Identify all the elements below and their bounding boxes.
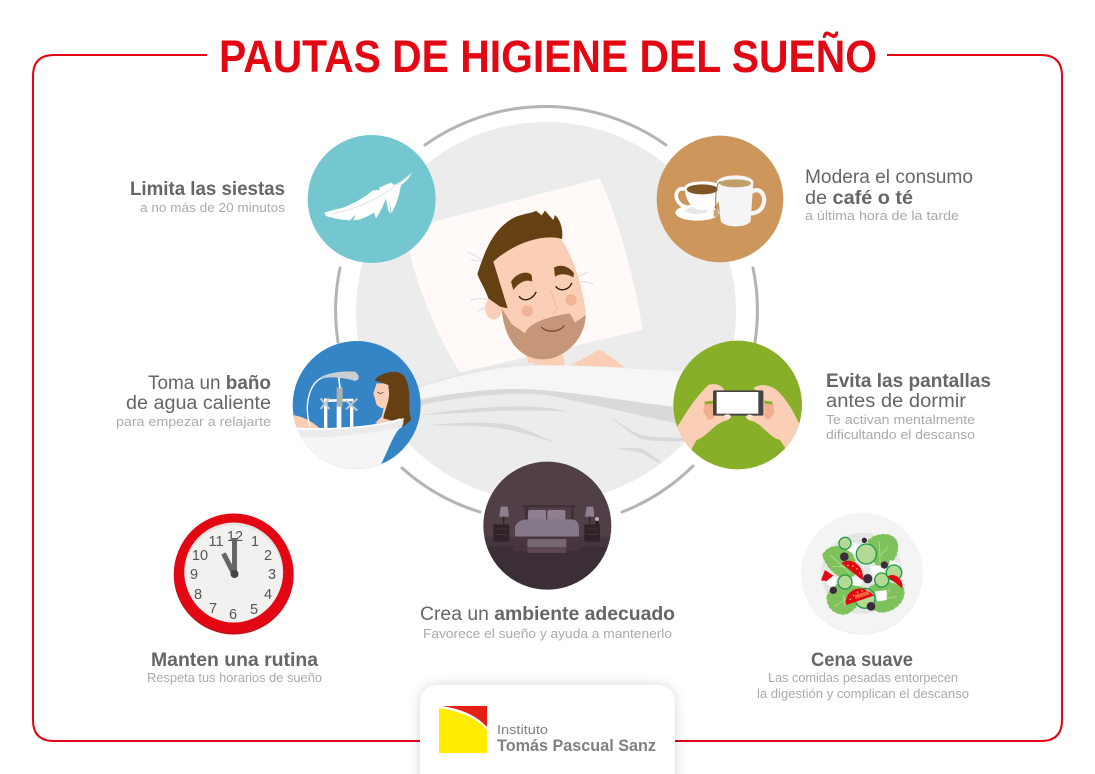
pillow <box>402 178 643 372</box>
cheeks <box>522 294 577 317</box>
clock numerals: 9 <box>190 567 198 583</box>
right hand <box>746 385 799 448</box>
logo card <box>420 685 675 774</box>
lamps <box>499 507 594 517</box>
phone <box>713 390 763 416</box>
text: toma un baño: para empezar a relajarte <box>116 415 271 429</box>
text: evita las pantallas: Te activan mentalmente <box>826 413 975 427</box>
ear <box>485 297 502 319</box>
text: modera el consumo <box>805 167 973 223</box>
face <box>493 237 586 359</box>
icon: salad plate <box>802 513 922 633</box>
clock numerals: 11 <box>208 534 224 550</box>
sleeping man on pillow <box>402 178 643 372</box>
text: limita las siestas: Limita las siestas <box>130 179 285 200</box>
closed eyes <box>519 283 572 300</box>
mouth <box>542 326 564 331</box>
neck and shoulder <box>526 350 627 370</box>
text: limita las siestas: a no más de 20 minutos <box>140 201 285 215</box>
clock numerals <box>190 529 276 623</box>
ring of grey arcs <box>336 107 757 512</box>
text: evita las pantallas: dificultando el descanso <box>826 428 975 442</box>
text: modera el consumo: Modera el consumo <box>805 167 973 188</box>
nose <box>550 289 557 314</box>
clock numerals: 3 <box>268 567 276 583</box>
snore lines <box>468 252 593 312</box>
icon: coffee and tea cups <box>657 136 783 262</box>
icon: bath <box>290 341 421 473</box>
logo mark <box>439 706 487 753</box>
text: evita las pantallas: antes de dormir <box>826 391 967 412</box>
clock numerals: 6 <box>229 607 237 623</box>
text: evita las pantallas <box>826 371 991 442</box>
text: ambiente adecuado: Crea un ambiente adecuado <box>420 604 675 625</box>
bench <box>527 539 566 547</box>
olives <box>830 538 888 611</box>
logo wordmark: Tomás Pascual Sanz <box>497 736 656 755</box>
text: limita las siestas <box>130 179 285 215</box>
flowers <box>596 521 598 525</box>
clock numerals: 1 <box>251 534 259 550</box>
clock numerals: 2 <box>264 548 272 564</box>
text: cena suave: Las comidas pesadas entorpecen <box>768 671 958 685</box>
text: cena suave <box>757 650 969 701</box>
taps <box>324 398 327 430</box>
lettuce <box>824 535 903 613</box>
tomatoes <box>821 561 903 605</box>
text: evita las pantallas: Evita las pantallas <box>826 371 991 392</box>
logo wordmark <box>497 722 656 755</box>
arm <box>294 415 320 428</box>
text: cena suave: Cena suave <box>811 650 913 671</box>
text: manten una rutina: Manten una rutina <box>151 650 318 671</box>
blanket <box>418 362 684 464</box>
text: ambiente adecuado <box>420 604 675 641</box>
clock numerals: 7 <box>209 601 217 617</box>
left hand <box>677 384 730 450</box>
bed <box>515 519 579 537</box>
logo wordmark: Instituto <box>497 722 548 737</box>
headboard <box>522 505 576 522</box>
gaps between fingers <box>704 401 772 404</box>
text: ambiente adecuado: Favorece el sueño y ayuda a mantenerlo <box>423 627 672 641</box>
clock numerals: 12 <box>227 529 243 545</box>
text: manten una rutina <box>147 650 322 685</box>
woman <box>375 407 392 424</box>
eyebrows <box>511 266 574 290</box>
title: PAUTAS DE HIGIENE DEL SUEÑO <box>219 31 877 82</box>
icon: feather <box>308 135 436 263</box>
shower hose <box>307 377 323 427</box>
icon: clock <box>174 514 294 634</box>
tub <box>298 418 404 469</box>
cucumbers <box>838 537 902 608</box>
text: manten una rutina: Respeta tus horarios de sueño <box>147 671 322 685</box>
text: toma un baño: de agua caliente <box>126 393 271 414</box>
icon: dark bedroom <box>482 462 615 593</box>
clock hands <box>224 554 234 574</box>
feta <box>827 540 900 602</box>
clock numerals: 4 <box>264 587 272 603</box>
pillows <box>528 510 546 522</box>
grey background disc <box>356 122 736 502</box>
clock numerals: 5 <box>250 602 258 618</box>
text: cena suave: la digestión y complican el descanso <box>757 687 969 701</box>
text: toma un baño <box>116 373 271 429</box>
text: modera el consumo: a última hora de la tarde <box>805 209 959 223</box>
text: toma un baño: Toma un baño <box>148 373 271 394</box>
beard <box>502 308 586 359</box>
hair <box>477 211 562 308</box>
clock numerals: 10 <box>192 548 208 564</box>
icon: phone in hands <box>672 341 803 469</box>
clock numerals: 8 <box>194 587 202 603</box>
nightstands <box>493 524 600 542</box>
text: modera el consumo: de café o té <box>805 188 913 209</box>
finger shadows <box>703 404 774 420</box>
